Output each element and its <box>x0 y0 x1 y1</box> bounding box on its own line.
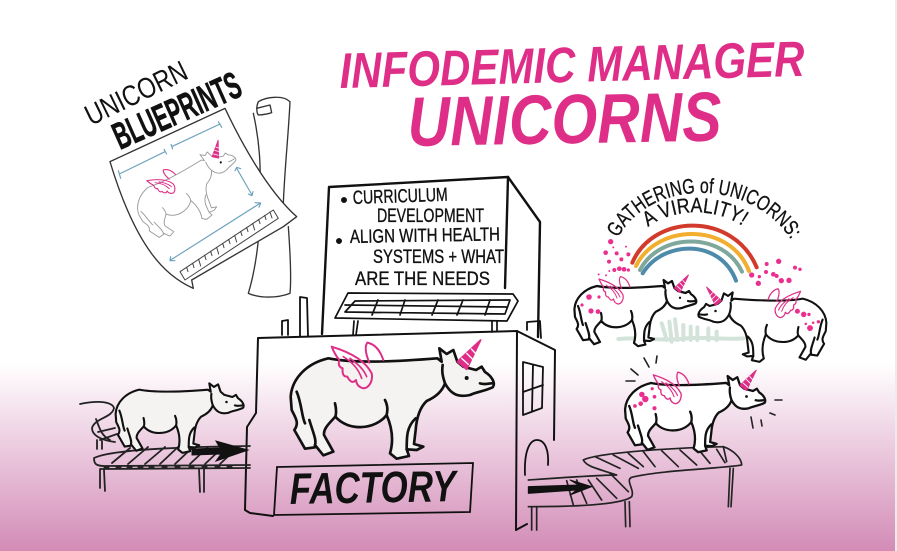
window <box>523 362 543 415</box>
plain rhino on conveyor <box>116 383 244 453</box>
arrow: out of factory <box>528 480 592 495</box>
pink particles <box>598 239 802 286</box>
solar panel shelf <box>335 293 518 335</box>
title: INFODEMIC MANAGER <box>339 31 805 99</box>
right cluster <box>528 226 802 530</box>
title <box>339 31 805 161</box>
left conveyor belt <box>80 402 250 492</box>
factory building <box>245 331 517 530</box>
rhino: upper left <box>574 275 696 346</box>
excitement ticks <box>626 356 782 428</box>
chimneys <box>282 297 541 338</box>
rolled paper scroll <box>248 97 291 297</box>
heading: unicorn blueprints: BLUEPRINTS <box>107 65 248 158</box>
factory sign: FACTORY <box>289 462 459 514</box>
whiteboard text <box>336 185 504 290</box>
arch door <box>525 440 548 475</box>
factory rhino <box>291 340 494 459</box>
whiteboard text: ARE THE NEEDS <box>355 269 490 290</box>
whiteboard text: DEVELOPMENT <box>377 206 484 227</box>
rainbow <box>632 226 757 281</box>
whiteboard text: SYSTEMS + WHAT <box>373 247 504 268</box>
rhino: upper right <box>698 287 826 362</box>
gathering label: A VIRALITY! <box>644 198 749 228</box>
blueprint dimension arrows <box>118 122 261 261</box>
grass <box>618 319 743 342</box>
rhino: bottom excited on conveyor <box>625 370 765 452</box>
gathering label: GATHERING of UNICORNS: <box>608 178 800 239</box>
arrow: into factory <box>192 441 248 461</box>
whiteboard text: CURRICULUM <box>352 185 448 209</box>
background gradient <box>0 363 897 551</box>
blueprint paper <box>110 108 297 288</box>
whiteboard <box>322 177 540 337</box>
factory <box>245 177 555 530</box>
heading: unicorn blueprints <box>80 55 248 158</box>
blueprint sheet and scroll <box>110 97 297 297</box>
whiteboard text: ALIGN WITH HEALTH <box>350 224 500 248</box>
blueprint rhino <box>125 137 254 246</box>
arch door conveyor <box>528 447 742 530</box>
title: UNICORNS <box>407 78 722 161</box>
ruler <box>180 210 278 280</box>
heading: unicorn blueprints: UNICORN <box>80 55 193 132</box>
